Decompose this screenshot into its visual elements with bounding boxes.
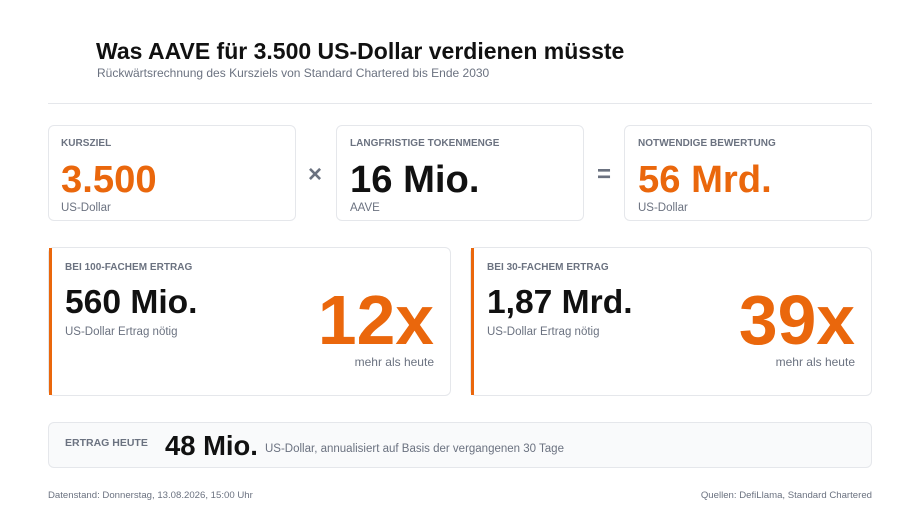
panel: Bewertung	[624, 125, 872, 221]
caption: Ertrag nötig: US-Dollar Ertrag nötig	[65, 326, 177, 338]
value: 3.500: 3.500	[61, 158, 157, 201]
unit: US-Dollar: US-Dollar	[638, 202, 688, 214]
panel: 100-facher Ertrag	[48, 247, 451, 396]
icon: multiply: ×	[308, 161, 322, 188]
label: Ertrag heute: ERTRAG HEUTE	[65, 437, 148, 449]
multiple: 39x: 39x	[739, 281, 855, 359]
panel: Kursziel	[48, 125, 296, 221]
value: 48 Mio.: 48 Mio.	[165, 430, 258, 461]
subtitle: Rückwärtsrechnung des Kursziels von Standard Chartered bis Ende 2030	[97, 66, 489, 80]
value: 1,87 Mrd.: 1,87 Mrd.	[487, 284, 633, 321]
label: 100-fach: BEI 100-FACHEM ERTRAG	[65, 262, 192, 273]
panel: Tokenmenge	[336, 125, 584, 221]
title: Was AAVE für 3.500 US-Dollar verdienen müsste	[96, 38, 624, 64]
label: Bewertung: NOTWENDIGE BEWERTUNG	[638, 138, 776, 149]
caption: annualisiert: US-Dollar, annualisiert auf Basis der vergangenen 30 Tage	[265, 443, 564, 455]
footer: Quellen: Quellen: DefiLlama, Standard Chartered	[701, 490, 872, 501]
icon: equals: =	[597, 161, 611, 188]
label: Tokenmenge: LANGFRISTIGE TOKENMENGE	[350, 138, 499, 149]
panel: 30-facher Ertrag	[470, 247, 872, 396]
label: 30-fach: BEI 30-FACHEM ERTRAG	[487, 262, 609, 273]
unit: AAVE: AAVE	[350, 202, 380, 214]
multiple: 12x: 12x	[318, 281, 434, 359]
label: Kursziel: KURSZIEL	[61, 138, 111, 149]
value: 16 Mio.: 16 Mio.	[350, 158, 479, 201]
footer: Datenstand: Datenstand: Donnerstag, 13.08.2026, 15:00 Uhr	[48, 490, 253, 501]
value: 560 Mio.: 560 Mio.	[65, 284, 198, 321]
caption: mehr als heute: mehr als heute	[776, 355, 855, 369]
panel: Ertrag heute	[48, 422, 872, 468]
caption: mehr als heute: mehr als heute	[355, 355, 434, 369]
value: 56 Mrd.: 56 Mrd.	[638, 158, 772, 201]
caption: Ertrag nötig: US-Dollar Ertrag nötig	[487, 326, 599, 338]
unit: US-Dollar: US-Dollar	[61, 202, 111, 214]
